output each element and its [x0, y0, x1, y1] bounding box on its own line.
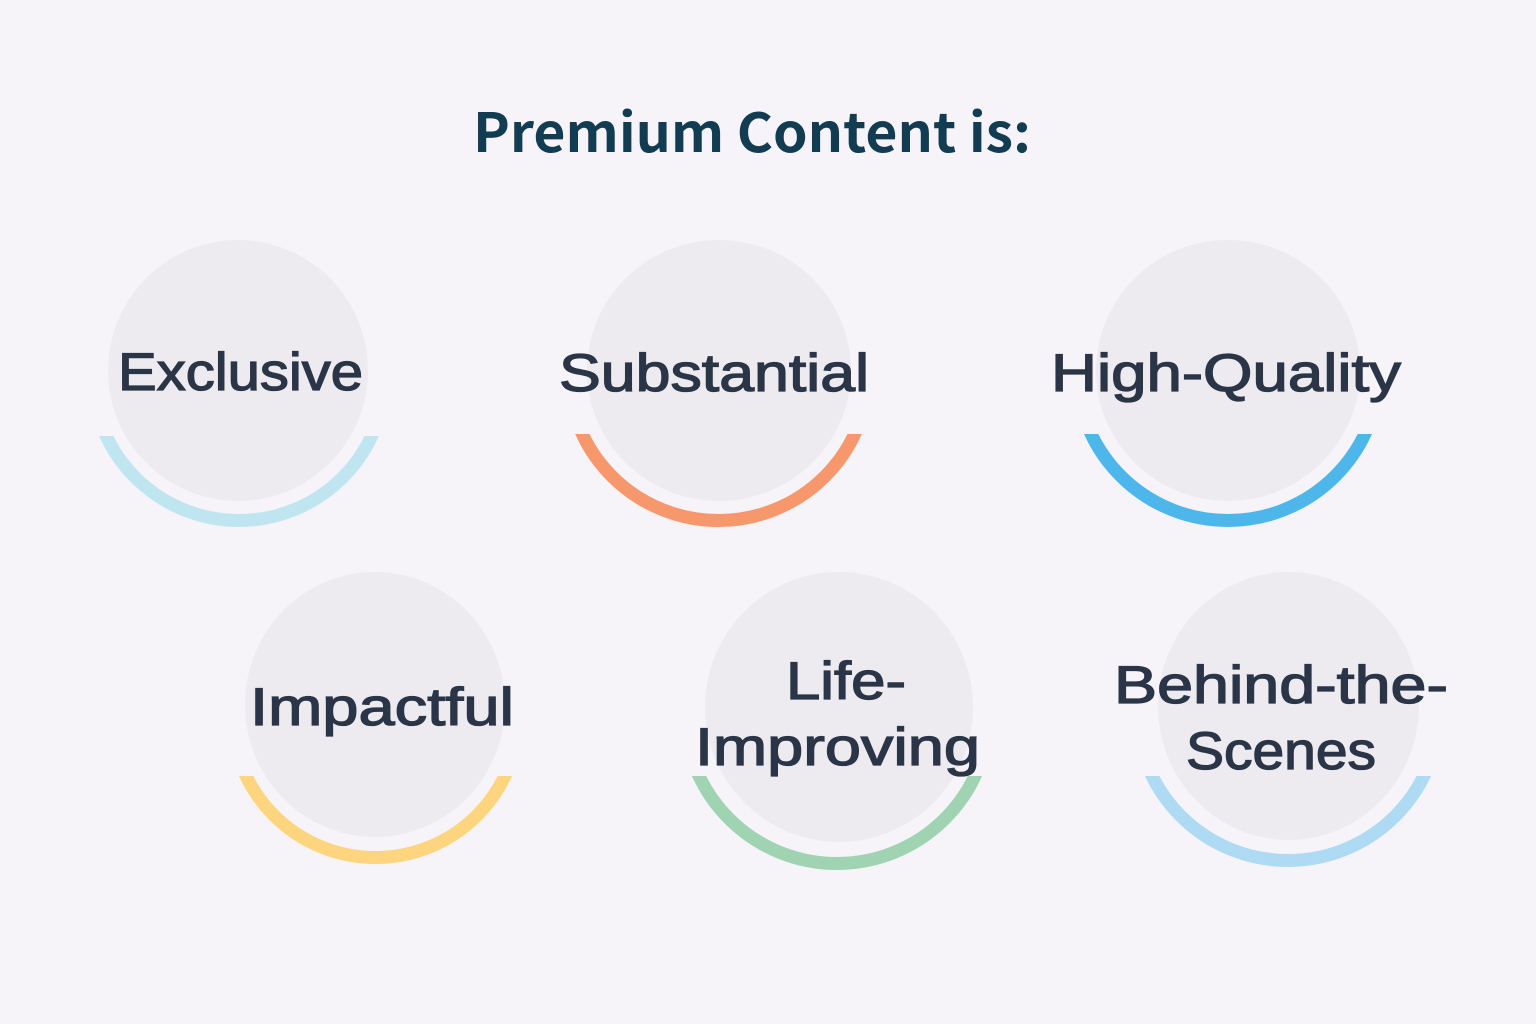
title: Premium Content is: [473, 89, 1031, 168]
item: Exclusive [92, 228, 386, 520]
arc: High-Quality [1084, 434, 1372, 527]
label: Life-Improving [695, 652, 980, 777]
label: Behind-the-Scenes: Behind-the- [1114, 656, 1448, 715]
circle: Life-Improving [705, 572, 973, 842]
label: Life-Improving: Life- [786, 652, 906, 711]
arc: Impactful [239, 776, 512, 864]
label: Behind-the-Scenes [1114, 656, 1448, 781]
label: Life-Improving: Improving [695, 718, 980, 777]
arc: Behind-the-Scenes [1145, 776, 1431, 867]
label: Behind-the-Scenes: Scenes [1186, 722, 1376, 781]
arc: Life-Improving [692, 776, 982, 870]
circle: Exclusive [108, 240, 368, 501]
item: Substantial [559, 220, 869, 520]
label: Exclusive: Exclusive [118, 343, 363, 402]
label: High-Quality: High-Quality [1051, 344, 1402, 403]
label: Impactful: Impactful [250, 678, 514, 737]
circle: Behind-the-Scenes [1158, 572, 1419, 840]
circle: High-Quality [1096, 240, 1360, 501]
item: Impactful [232, 570, 519, 858]
label: Substantial: Substantial [559, 344, 869, 403]
circle: Substantial [587, 240, 851, 501]
arc: Exclusive [99, 436, 379, 527]
item: Life-Improving [684, 558, 990, 864]
arc: Substantial [575, 434, 862, 527]
item: Behind-the-Scenes [1114, 558, 1448, 860]
item: High-Quality [1051, 218, 1402, 520]
circle: Impactful [245, 572, 505, 837]
